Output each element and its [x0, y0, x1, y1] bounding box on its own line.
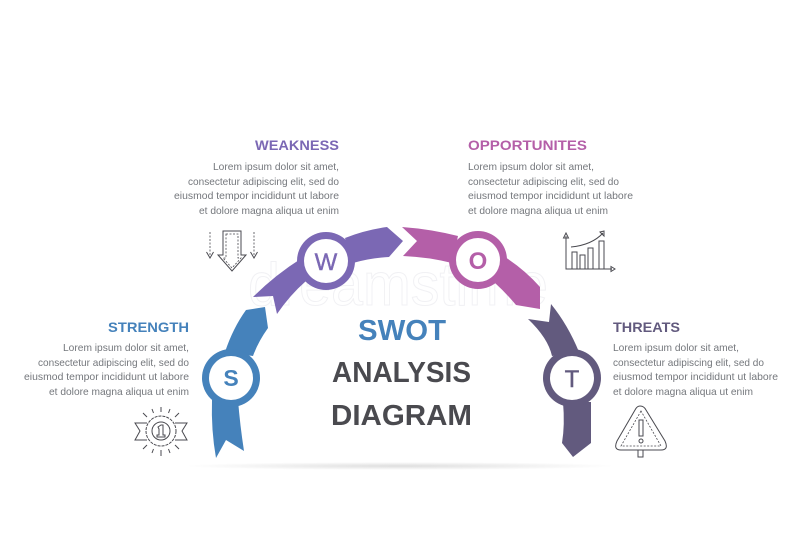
badge: S — [202, 349, 260, 407]
center title: DIAGRAM — [331, 400, 472, 432]
badge: W: W — [315, 249, 338, 276]
icon: warning triangle — [616, 406, 666, 457]
text block: opportunities — [468, 137, 633, 217]
center title: ANALYSIS — [332, 357, 471, 389]
segment: strength ribbon — [202, 307, 268, 458]
badge: S: S — [223, 365, 239, 391]
center title — [331, 315, 472, 432]
text block: strength: consectetur adipiscing elit, sed do — [38, 357, 189, 369]
text block: threats: THREATS — [613, 319, 680, 335]
icon: down arrows — [206, 231, 258, 271]
badge: W — [297, 232, 355, 290]
text block: strength: et dolore magna aliqua ut enim — [49, 386, 189, 398]
badge: T: T — [565, 366, 580, 393]
segment: threats ribbon — [528, 304, 601, 457]
text block: threats: Lorem ipsum dolor sit amet, — [613, 342, 739, 354]
text block: opportunities: et dolore magna aliqua ut enim — [468, 205, 608, 217]
text block: weakness: consectetur adipiscing elit, sed do — [188, 176, 339, 188]
ground shadow — [184, 462, 616, 470]
segment: opportunities ribbon — [402, 227, 540, 309]
text block: strength: Lorem ipsum dolor sit amet, — [63, 342, 189, 354]
text block: weakness: eiusmod tempor incididunt ut labore — [174, 190, 339, 202]
center title: SWOT — [358, 315, 446, 347]
watermark: dreamstime — [248, 251, 548, 318]
text block: threats: consectetur adipiscing elit, sed do — [613, 357, 764, 369]
text block: weakness: Lorem ipsum dolor sit amet, — [213, 161, 339, 173]
text block: weakness: et dolore magna aliqua ut enim — [199, 205, 339, 217]
badge: O: O — [469, 248, 487, 275]
text block: threats — [613, 319, 778, 398]
text block: opportunities: OPPORTUNITES — [468, 137, 587, 153]
icon: medal — [135, 407, 187, 456]
badge: T — [543, 349, 601, 407]
text block: strength: STRENGTH — [108, 319, 189, 335]
text block: opportunities: consectetur adipiscing elit, sed do — [468, 176, 619, 188]
text block: opportunities: Lorem ipsum dolor sit amet, — [468, 161, 594, 173]
text block: weakness: WEAKNESS — [255, 137, 339, 153]
text block: threats: eiusmod tempor incididunt ut labore — [613, 371, 778, 383]
icon: growth chart — [564, 231, 615, 272]
text block: strength — [24, 319, 189, 398]
text block: weakness — [174, 137, 339, 217]
segment: weakness ribbon — [253, 227, 403, 314]
text block: opportunities: eiusmod tempor incididunt ut labore — [468, 190, 633, 202]
text block: strength: eiusmod tempor incididunt ut labore — [24, 371, 189, 383]
text block: threats: et dolore magna aliqua ut enim — [613, 386, 753, 398]
